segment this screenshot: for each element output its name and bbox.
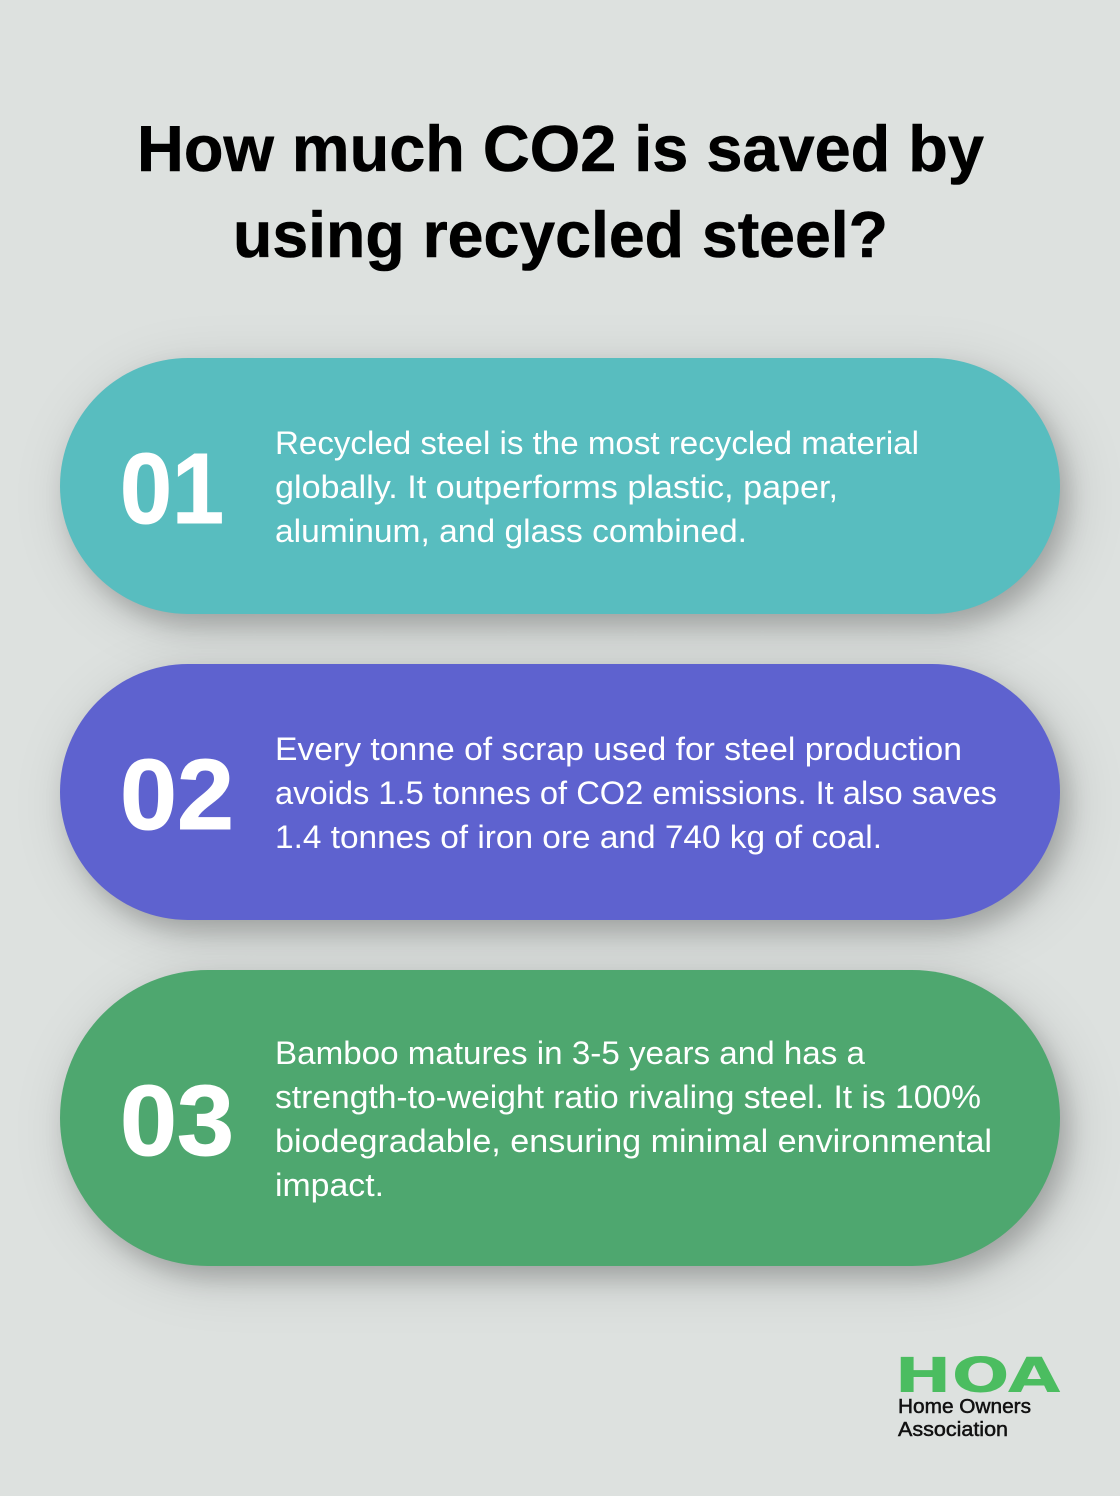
- card 01 text: Recycled steel is the most recycled material: [275, 425, 919, 461]
- logo caption: Association: [898, 1419, 1008, 1441]
- logo caption: [898, 1396, 1031, 1441]
- panel: card 01: [60, 358, 1060, 614]
- card 01 text: globally. It outperforms plastic, paper,: [275, 469, 838, 505]
- number 03: 03: [120, 1065, 234, 1177]
- card 02 text: Every tonne of scrap used for steel production: [275, 731, 962, 767]
- card 02 text: 1.4 tonnes of iron ore and 740 kg of coal.: [275, 819, 882, 855]
- card 01 text: aluminum, and glass combined.: [275, 513, 747, 549]
- card 03 text: biodegradable, ensuring minimal environmental: [275, 1123, 992, 1159]
- logo caption: Home Owners: [898, 1396, 1031, 1418]
- number 01: 01: [120, 433, 224, 545]
- title: using recycled steel?: [233, 198, 888, 271]
- title: [137, 112, 984, 272]
- card 02 text: [275, 731, 997, 855]
- card 01 text: [275, 425, 919, 549]
- card 03 text: impact.: [275, 1167, 384, 1203]
- card 03 text: Bamboo matures in 3-5 years and has a: [275, 1035, 865, 1071]
- title: How much CO2 is saved by: [137, 112, 984, 185]
- panel: card 03: [60, 970, 1060, 1266]
- number 02: 02: [120, 739, 234, 851]
- logo: HOA Home Owners Association: [894, 1350, 1060, 1441]
- card 03 text: strength-to-weight ratio rivaling steel. It is 100%: [275, 1079, 981, 1115]
- card 03 text: [275, 1035, 992, 1203]
- panel: card 02: [60, 664, 1060, 920]
- card 02 text: avoids 1.5 tonnes of CO2 emissions. It also saves: [275, 775, 997, 811]
